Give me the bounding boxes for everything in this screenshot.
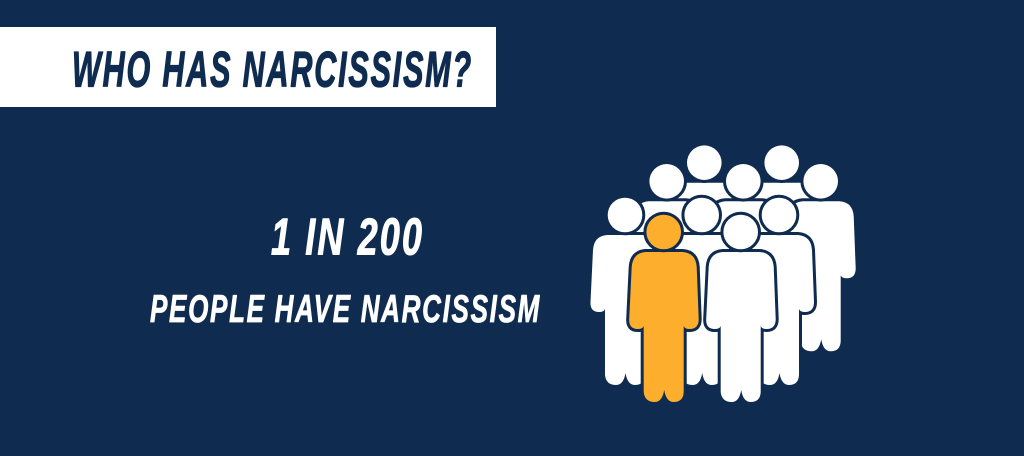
statistic caption: PEOPLE HAVE NARCISSISM <box>150 288 541 331</box>
person: second row right <box>744 198 814 385</box>
title: WHO HAS NARCISSISM? <box>72 42 473 98</box>
icon: crowd of people with one highlighted <box>590 145 856 402</box>
person: back row right <box>747 145 817 333</box>
title banner <box>0 27 496 107</box>
person: highlighted orange figure <box>629 215 699 402</box>
person: middle row right <box>786 164 856 351</box>
person: front row white figure <box>706 215 776 402</box>
person: second row left <box>590 198 660 385</box>
person: middle row centre <box>709 164 778 351</box>
person: back row left <box>670 145 739 333</box>
person: middle row left <box>632 164 702 351</box>
person: second row centre <box>667 198 737 385</box>
statistic: 1 in 200: 1 IN 200 <box>271 208 424 266</box>
